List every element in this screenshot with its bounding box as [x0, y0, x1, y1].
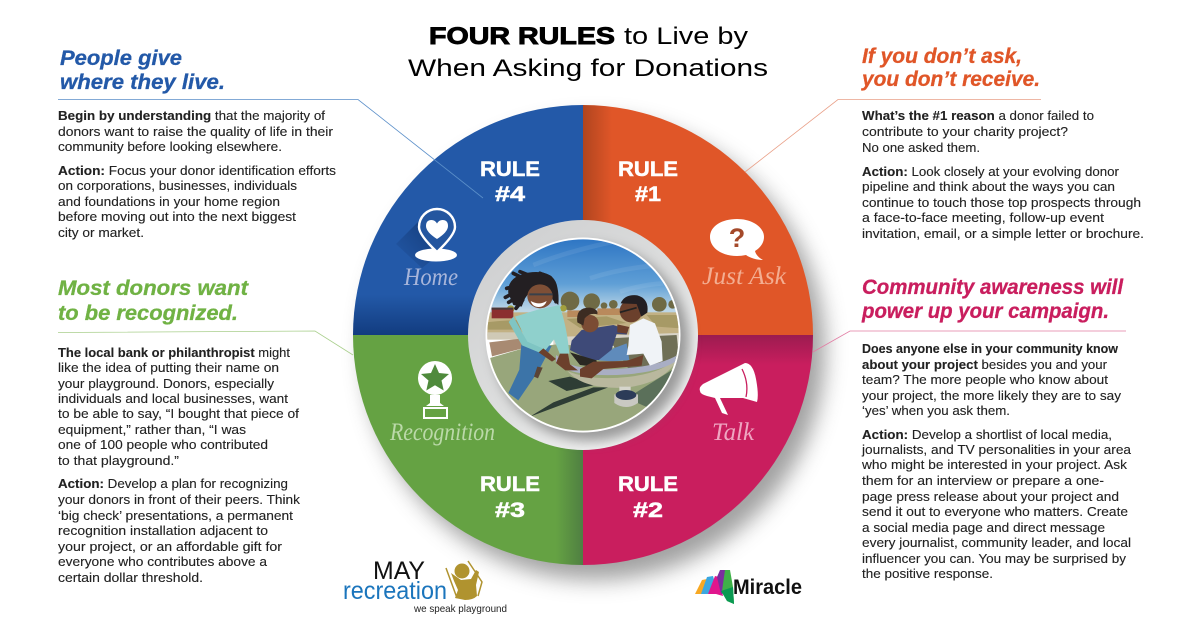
leader line: rule 2 — [813, 331, 1126, 352]
logo: Miracle: Miracle — [733, 576, 802, 599]
text: rule 4 body: community before looking elsewhere. — [58, 139, 282, 154]
circular rules diagram — [353, 105, 825, 580]
rule labels: RULE — [618, 158, 678, 181]
text: rule 2 body: send it out to everyone who matters. Create — [862, 504, 1128, 519]
girl — [508, 340, 552, 400]
text: rule 1 body: a face-to-face meeting, follow-up event — [862, 210, 1104, 225]
text: rule 1 body: Action: Look closely at your evolving donor — [862, 164, 1120, 179]
text: rule 4 body: on corporations, businesses, individuals — [58, 178, 298, 193]
text: rule 1 body: contribute to your charity project? — [862, 124, 1068, 139]
text: rule 3 body: one of 100 people who contributed — [58, 437, 268, 452]
heading: most donors — [58, 277, 249, 325]
rule labels: #3 — [495, 499, 525, 522]
text: rule 3 body: your playground. Donors, especially — [58, 376, 275, 391]
boy 2 — [627, 318, 663, 366]
text: rule 3 body: certain dollar threshold. — [58, 570, 203, 585]
text: rule 1 body: invitation, email, or a simple letter or brochure. — [862, 226, 1144, 241]
text: rule 1 body: No one asked them. — [862, 140, 980, 155]
text: rule 3 body: your project, or an affordable gift for — [58, 539, 283, 554]
text: rule 2 body: ‘yes’ when you ask them. — [862, 403, 1010, 418]
heading: most donors: to be recognized. — [58, 302, 238, 325]
logo: May Recreation — [343, 557, 507, 615]
text: rule 2 body: who might be interested in your project. Ask — [861, 457, 1128, 472]
spinner bowl — [613, 335, 678, 368]
logo: May Recreation: MAY — [373, 557, 425, 585]
center ring — [468, 220, 698, 450]
text: rule 3 body: recognition installation adjacent to — [58, 523, 268, 538]
text: rule 2 body: every journalist, community leader, and local — [862, 535, 1131, 550]
text: rule 2 body: team? The more people who know about — [862, 372, 1108, 387]
icon: speech bubble: ? — [729, 223, 745, 253]
title: When Asking for Donations — [408, 55, 768, 82]
text: rule 3 body: to that playground.” — [58, 453, 179, 468]
rule labels: #1 — [635, 183, 661, 206]
text: rule 2 body: influencer you can. You may be surprised by — [862, 551, 1127, 566]
heading: people give — [60, 47, 225, 94]
leader line: rule 3 — [58, 331, 353, 355]
icon: speech bubble — [710, 219, 764, 260]
logo: May Recreation: we speak playground — [413, 603, 507, 615]
text: rule 1 body: continue to touch those top prospects through — [862, 195, 1141, 210]
wedge: rule 4 — [353, 105, 583, 335]
photo: children on playground spinner — [487, 239, 679, 431]
heading: most donors: Most donors want — [58, 277, 249, 300]
text: rule 1 body — [862, 108, 1144, 241]
text: rule 2 body: a social media page and direct message — [862, 520, 1105, 535]
boy 1 — [570, 325, 628, 360]
rule labels: RULE — [480, 158, 540, 181]
label: Talk: Talk — [712, 419, 755, 446]
icon: gold child on swing — [446, 561, 482, 600]
logo: May Recreation: recreation — [343, 577, 447, 605]
heading: people give: People give — [60, 47, 182, 70]
leader line: rule 1 — [745, 100, 1041, 172]
wedge: rule 1 — [583, 105, 813, 335]
title: FOUR RULES — [429, 23, 615, 50]
text: rule 2 body: the positive response. — [862, 566, 993, 581]
wedge: rule 3 — [353, 335, 583, 565]
text: rule 3 body: your donors in front of their peers. Think — [58, 492, 301, 507]
label: Recognition: Recognition — [389, 419, 495, 446]
text: rule 3 body: ‘big check’ presentations, a permanent — [58, 508, 293, 523]
heading: community awareness: Community awareness will — [862, 276, 1124, 299]
rule labels: RULE — [480, 473, 540, 496]
rule labels: RULE — [618, 473, 678, 496]
text: rule 4 body: before moving out into the next biggest — [58, 209, 296, 224]
text: rule 2 body: Action: Develop a shortlist of local media, — [862, 427, 1112, 442]
text: rule 2 body: about your project besides you and your — [862, 357, 1108, 372]
title — [408, 23, 768, 82]
text: rule 3 body: to be able to say, “I bought that piece of — [58, 406, 299, 421]
text: rule 2 body: them for an interview or prepare a one- — [862, 473, 1104, 488]
text: rule 3 body: individuals and local businesses, want — [58, 391, 288, 406]
label: Just Ask: Just Ask — [702, 263, 787, 290]
heading: community awareness — [861, 276, 1124, 323]
icon: ribbon mark — [695, 570, 734, 604]
heading: if you don't ask — [861, 45, 1040, 91]
text: rule 3 body — [58, 345, 301, 585]
spinner post and base — [619, 386, 631, 392]
text: rule 3 body: The local bank or philanthropist might — [58, 345, 290, 360]
text: rule 2 body: your project, the more likely they are to say — [862, 388, 1122, 403]
heading: people give: where they live. — [60, 71, 225, 94]
rule labels: #2 — [633, 499, 663, 522]
heading: if you don't ask: you don’t receive. — [861, 68, 1040, 91]
label: Home: Home — [403, 264, 458, 291]
heading: community awareness: power up your campaign. — [861, 300, 1109, 323]
wedge: rule 2 — [583, 335, 813, 565]
text: rule 3 body: equipment,” rather than, “I was — [58, 422, 247, 437]
text: rule 4 body: city or market. — [58, 225, 144, 240]
text: rule 1 body: pipeline and think about the ways you can — [862, 179, 1115, 194]
text: rule 2 body — [861, 341, 1132, 581]
text: rule 1 body: What’s the #1 reason a donor failed to — [862, 108, 1094, 123]
rule labels: #4 — [495, 183, 525, 206]
text: rule 4 body: and foundations in your home region — [58, 194, 280, 209]
text: rule 3 body: Action: Develop a plan for recognizing — [58, 476, 288, 491]
text: rule 4 body: donors want to raise the quality of life in their — [58, 124, 334, 139]
heading: if you don't ask: If you don’t ask, — [862, 45, 1022, 68]
text: rule 3 body: everyone who contributes above a — [58, 554, 268, 569]
text: rule 4 body — [58, 108, 337, 240]
title: to Live by — [624, 23, 748, 50]
text: rule 2 body: Does anyone else in your community know — [862, 341, 1119, 356]
text: rule 3 body: like the idea of putting their name on — [58, 360, 279, 375]
text: rule 2 body: page press release about your project and — [862, 489, 1119, 504]
text: rule 2 body: journalists, and TV personalities in your area — [861, 442, 1132, 457]
icon: home pin — [396, 209, 457, 268]
rule labels — [480, 158, 678, 522]
logo: Miracle — [695, 570, 802, 604]
text: rule 4 body: Begin by understanding that the majority of — [58, 108, 325, 123]
icon: recognition trophy — [418, 361, 452, 418]
leader line: rule 4 — [58, 100, 483, 198]
text: rule 4 body: Action: Focus your donor identification efforts — [58, 163, 337, 178]
icon: megaphone — [700, 363, 758, 415]
